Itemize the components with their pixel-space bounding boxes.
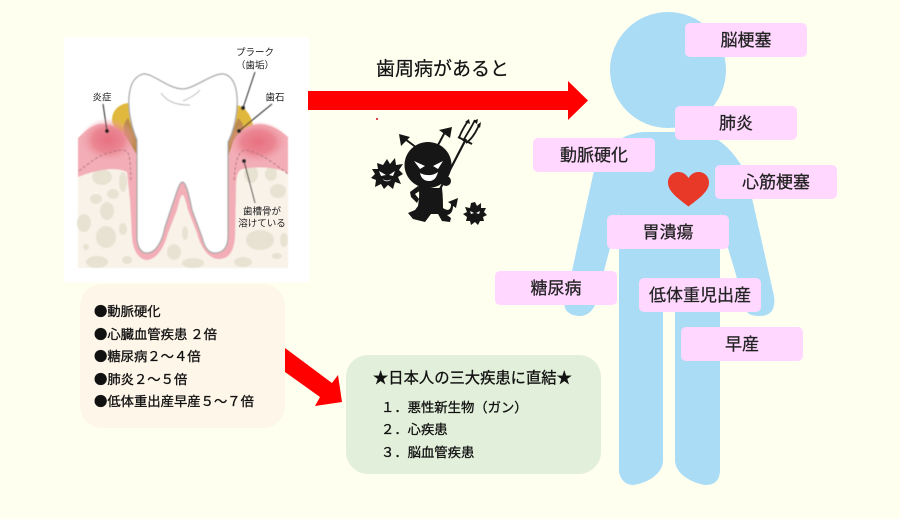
heading: 歯周病があると: 歯周病があると — [376, 54, 509, 81]
trident — [425, 120, 479, 218]
tooth labels: 炎症 — [92, 90, 112, 104]
tooth labels — [92, 44, 286, 230]
risk 3: ●糖尿病２～４倍 — [94, 346, 201, 365]
arrow: main right — [308, 81, 588, 120]
label: 動脈硬化 — [533, 138, 655, 172]
devil arm — [410, 186, 421, 203]
label: 胃潰瘍 — [607, 215, 729, 249]
tooth crease — [161, 90, 200, 105]
item 3: ３．脳血管疾患 — [381, 442, 474, 461]
panel: three major diseases — [346, 355, 601, 474]
tooth labels: 歯槽骨が — [243, 204, 281, 218]
tail — [442, 198, 458, 215]
germ left — [371, 158, 403, 189]
devil face — [379, 161, 480, 214]
risk 5: ●低体重出産早産５～７倍 — [94, 391, 254, 410]
label: 早産 — [681, 327, 803, 361]
plaque and calculus — [112, 103, 253, 160]
tooth labels: プラーク — [236, 44, 274, 58]
human silhouette — [564, 12, 774, 485]
item 1: １．悪性新生物（ガン） — [381, 397, 528, 416]
risk 2: ●心臓血管疾患 ２倍 — [94, 324, 217, 343]
panel heading: ★日本人の三大疾患に直結★ — [373, 366, 572, 388]
devil horns — [399, 127, 452, 148]
label: 心筋梗塞 — [715, 165, 837, 199]
risk 1: ●動脈硬化 — [94, 301, 161, 320]
trident tips — [465, 119, 481, 128]
devil hand — [441, 176, 451, 186]
tooth labels: 溶けている — [238, 216, 286, 230]
gums — [78, 118, 288, 260]
icon: heart — [668, 172, 709, 206]
tooth labels: （歯垢） — [236, 58, 274, 72]
label: 肺炎: 肺炎 — [719, 109, 753, 134]
tooth — [129, 74, 237, 253]
label: 脳梗塞 — [685, 23, 807, 57]
body — [565, 132, 774, 485]
tooth labels: 歯石 — [265, 90, 285, 104]
label: 心筋梗塞: 心筋梗塞 — [742, 168, 810, 193]
label: 早産: 早産 — [725, 330, 759, 355]
head — [610, 12, 726, 128]
label: 糖尿病: 糖尿病 — [530, 274, 582, 299]
item 2: ２．心疾患 — [381, 419, 448, 438]
panel: risk list — [80, 284, 285, 428]
panel: tooth diagram — [64, 37, 309, 282]
label: 胃潰瘍: 胃潰瘍 — [642, 218, 694, 243]
devil head — [404, 142, 452, 188]
icon: devil and germs — [371, 119, 487, 225]
risk 4: ●肺炎２～５倍 — [94, 369, 187, 388]
label: 動脈硬化: 動脈硬化 — [560, 141, 628, 166]
devil body — [408, 184, 451, 222]
label: 糖尿病 — [495, 271, 617, 305]
arrow: diagonal — [285, 348, 342, 406]
bone — [77, 160, 288, 268]
label: 肺炎 — [675, 106, 797, 140]
dot — [376, 118, 378, 120]
label: 低体重児出産: 低体重児出産 — [649, 281, 751, 306]
label: 低体重児出産 — [639, 278, 761, 312]
label: 脳梗塞: 脳梗塞 — [720, 26, 772, 51]
leader lines — [103, 72, 272, 203]
germ right — [463, 202, 487, 225]
